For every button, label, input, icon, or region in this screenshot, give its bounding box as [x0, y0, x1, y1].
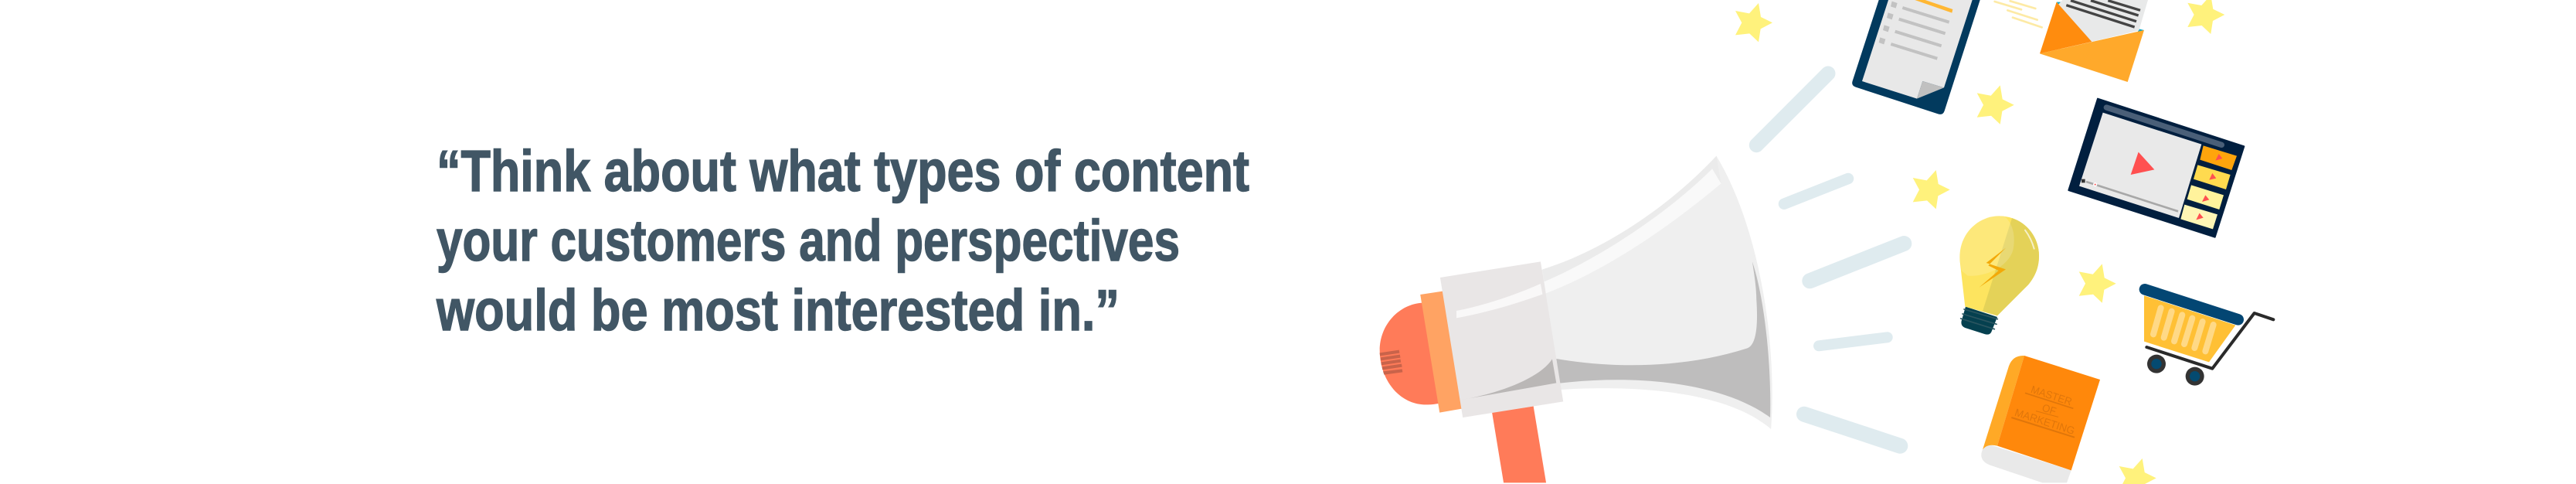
star 2 [1913, 170, 1950, 209]
filament bolt [1980, 248, 2006, 288]
quote text: would be most interested in.” [436, 278, 1120, 343]
star 6 [2119, 458, 2156, 484]
star 4 [1977, 85, 2014, 124]
megaphone handle [1492, 406, 1546, 482]
collar highlight [1456, 284, 1542, 318]
quote text: your customers and perspectives [437, 208, 1180, 273]
icon: light bulb [1959, 216, 2039, 335]
bulb glass [1959, 216, 2039, 315]
book title: OF [2041, 402, 2058, 418]
icon: shopping cart [2144, 289, 2273, 386]
letter [2058, 0, 2148, 42]
quote text [436, 138, 1249, 343]
star 1 [1735, 3, 1772, 42]
megaphone rear cap [1380, 303, 1440, 404]
book title: MARKETING [2014, 407, 2076, 437]
collar shadow [1460, 359, 1556, 400]
play button [2131, 152, 2154, 175]
megaphone [1380, 156, 1772, 482]
star 3 [2187, 0, 2224, 34]
horn inner shadow [1556, 261, 1770, 418]
video thumbnails [2200, 145, 2237, 170]
book spine [1983, 356, 2024, 450]
icon: book [1981, 356, 2100, 482]
star 5 [2079, 264, 2116, 303]
megaphone collar [1440, 261, 1563, 418]
book title: MASTER [2030, 383, 2074, 407]
horn top edge [1542, 156, 1721, 281]
sound lines [1756, 73, 1904, 446]
megaphone grille [1380, 350, 1402, 375]
book pages [1981, 445, 2071, 482]
megaphone horn [1540, 156, 1772, 429]
bulb base [1961, 307, 1997, 335]
icon: envelope [1995, 0, 2148, 82]
book title [2014, 383, 2076, 437]
icon: clipboard document [1852, 0, 1980, 114]
icon: video player [2068, 99, 2244, 237]
quote text: “Think about what types of content [437, 138, 1249, 203]
motion lines [1995, 1, 2042, 27]
horn highlight [1545, 169, 1721, 293]
megaphone orange band [1420, 291, 1462, 413]
book cover [1997, 356, 2100, 470]
